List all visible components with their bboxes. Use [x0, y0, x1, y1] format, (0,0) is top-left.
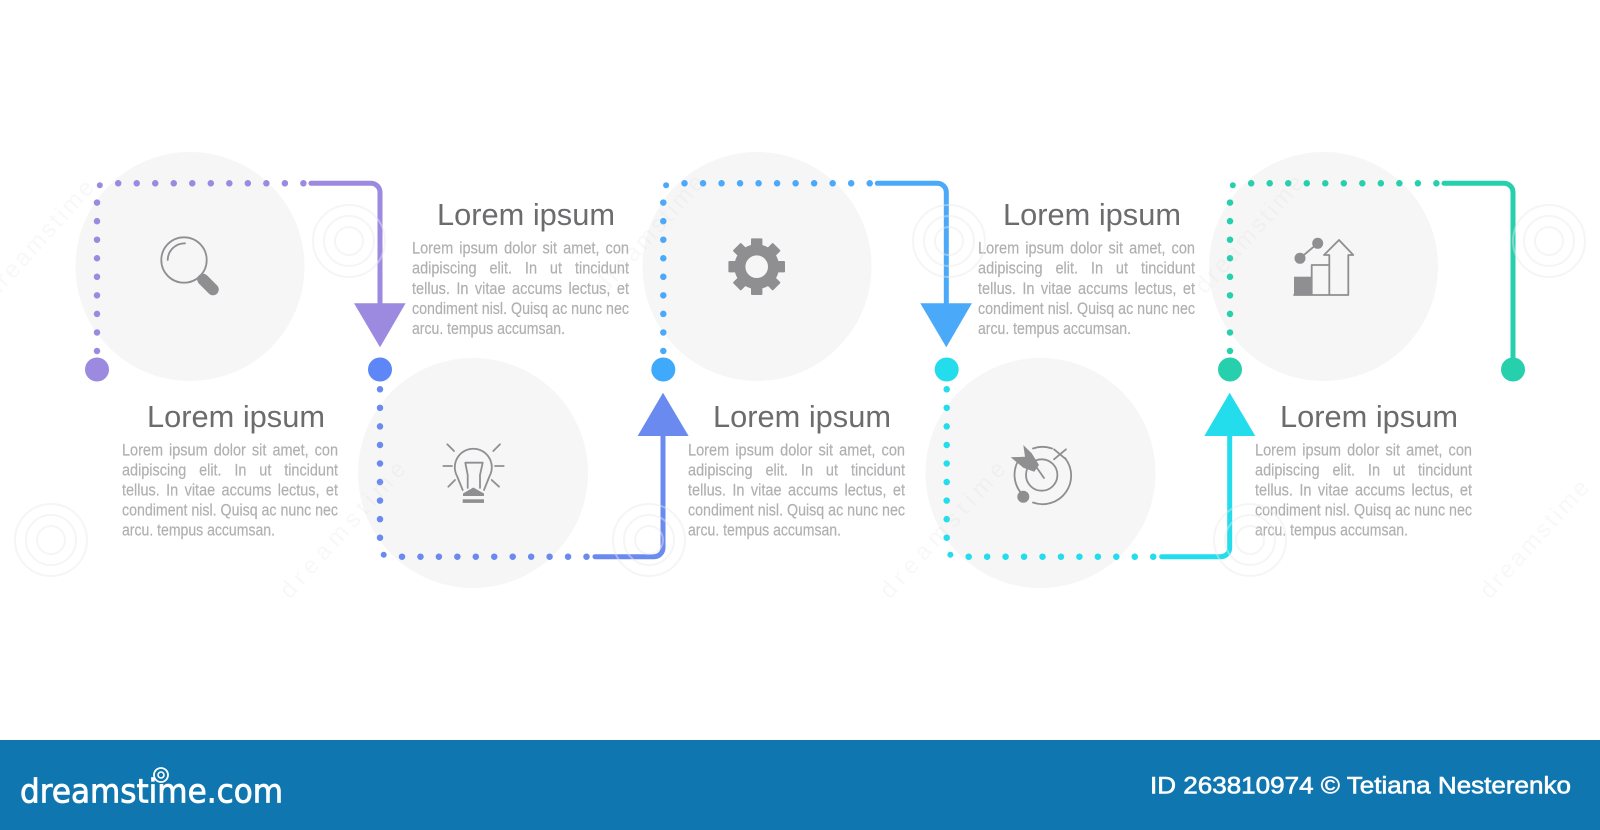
watermark: spirals and stock site text [0, 169, 1595, 604]
text block: step 1: Lorem ipsum dolor sit amet, con [122, 440, 338, 460]
text block: step 5: tellus. In vitae accums lectus, et [1255, 481, 1472, 500]
text block: step 2: tellus. In vitae accums lectus, et [412, 279, 629, 298]
text block: step 1: arcu. tempus accumsan. [122, 521, 275, 540]
text block: step 4 [978, 197, 1195, 338]
icon: light bulb [443, 444, 504, 503]
footer bar [0, 740, 1600, 830]
text block: step 2: arcu. tempus accumsan. [412, 319, 565, 338]
text block: step 3: condiment nisl. Quisq ac nunc nec [688, 501, 905, 520]
text block: step 5: Lorem ipsum dolor sit amet, con [1255, 440, 1472, 460]
text block: step 5 [1255, 399, 1472, 540]
text block: step 1 [122, 399, 338, 540]
text block: step 2 [412, 197, 629, 338]
text block: step 1: Lorem ipsum [147, 399, 325, 434]
connector: step 2 blue arrow [368, 358, 689, 557]
footer logo wordmark: dreamstime.com [20, 772, 283, 810]
text block: step 2: condiment nisl. Quisq ac nunc nec [412, 299, 629, 318]
text block: step 2: Lorem ipsum [437, 197, 615, 232]
text block: step 4: Lorem ipsum [1003, 197, 1181, 232]
connector: step 4 cyan arrow [935, 358, 1255, 557]
text block: step 5: adipiscing elit. In ut tincidunt [1255, 460, 1472, 480]
text block: step 3 [688, 399, 905, 540]
text block: step 4: arcu. tempus accumsan. [978, 319, 1131, 338]
text block: step 2: adipiscing elit. In ut tincidunt [412, 259, 629, 278]
text block: step 4: tellus. In vitae accums lectus, et [978, 279, 1195, 298]
footer image ID and author credit: ID 263810974 © Tetiana Nesterenko [1150, 772, 1571, 799]
text block: step 3: Lorem ipsum [713, 399, 891, 434]
text block: step 5: arcu. tempus accumsan. [1255, 521, 1408, 540]
icon: dart target [1011, 445, 1071, 504]
watermark: spirals and stock site text: dreamstime [589, 169, 710, 299]
text block: step 3: Lorem ipsum dolor sit amet, con [688, 440, 905, 460]
connector: step 3 sky blue arrow [651, 183, 972, 382]
text block: step 5: Lorem ipsum [1280, 399, 1458, 434]
text block: step 4: condiment nisl. Quisq ac nunc nec [978, 299, 1195, 318]
watermark: spirals and stock site text: dreamstime [274, 456, 412, 604]
text block: step 3: adipiscing elit. In ut tincidunt [688, 460, 905, 480]
watermark: spirals and stock site text: dreamstime [874, 456, 1012, 604]
text block: step 1: adipiscing elit. In ut tincidunt [122, 460, 338, 480]
text block: step 3: tellus. In vitae accums lectus, et [688, 481, 905, 500]
connector: step 5 teal line [1218, 183, 1525, 382]
text block: step 1: condiment nisl. Quisq ac nunc nec [122, 501, 338, 520]
icon: magnifying glass [161, 237, 213, 290]
text block: step 4: Lorem ipsum dolor sit amet, con [978, 238, 1195, 258]
watermark: spirals and stock site text: dreamstime [1474, 474, 1595, 604]
text block: step 1: tellus. In vitae accums lectus, et [122, 481, 338, 500]
connector: step 1 purple arrow [85, 183, 406, 382]
icon: growth chart with arrow [1294, 238, 1353, 295]
text block: step 2: Lorem ipsum dolor sit amet, con [412, 238, 629, 258]
watermark: spirals and stock site text: dreamstime [1189, 169, 1310, 299]
text block: step 5: condiment nisl. Quisq ac nunc nec [1255, 501, 1472, 520]
text block: step 3: arcu. tempus accumsan. [688, 521, 841, 540]
text block: step 4: adipiscing elit. In ut tincidunt [978, 259, 1195, 278]
icon: gear [728, 238, 785, 295]
panel: background circles [76, 152, 1438, 588]
